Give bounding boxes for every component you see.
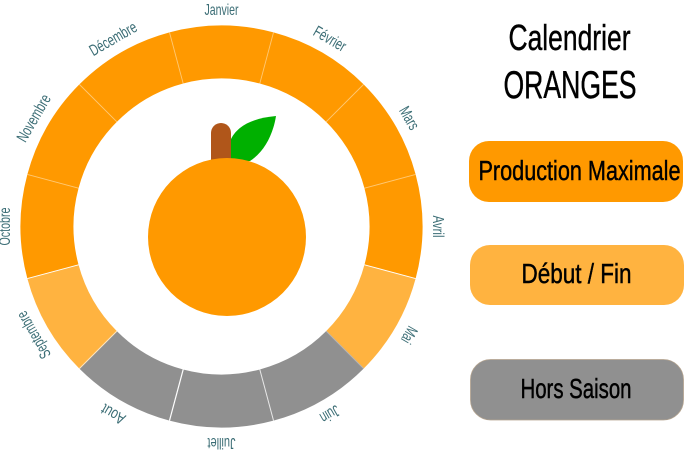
label: Novembre: Novembre [14, 92, 55, 145]
icon: leaf [231, 116, 276, 162]
icon: stem [211, 123, 231, 165]
label: Mai: Mai [397, 323, 420, 346]
legend item: Hors Saison: Hors Saison [520, 373, 632, 404]
segment: Novembre [21, 81, 124, 200]
segment: Octobre [21, 174, 79, 279]
icon: orange fruit [148, 116, 306, 316]
legend item: Début / Fin: Début / Fin [522, 258, 632, 289]
segment: Mai [319, 253, 422, 372]
label: Février: Février [310, 23, 349, 56]
calendar ring [21, 26, 422, 427]
segment: Mars [319, 81, 422, 200]
label: Juin: Juin [317, 401, 342, 426]
label: Mars: Mars [395, 104, 422, 133]
segment: Juin [248, 324, 367, 427]
label: Janvier: Janvier [204, 2, 239, 19]
label: Avril: Avril [429, 216, 446, 238]
legend [469, 141, 684, 420]
label: Décembre: Décembre [87, 19, 140, 60]
segment: Août [76, 324, 195, 427]
label: Juillet: Juillet [207, 434, 236, 451]
title line: Calendrier: Calendrier [508, 17, 631, 58]
segment: Février [248, 26, 367, 129]
legend item: Début / Fin [470, 245, 684, 305]
legend item: Hors Saison [470, 360, 684, 420]
legend item: Production Maximale [469, 141, 683, 202]
label: Aout: Aout [98, 400, 129, 427]
label: Septembre: Septembre [14, 308, 55, 361]
icon: orange body [148, 158, 306, 316]
title [504, 17, 636, 107]
segment: Septembre [21, 253, 124, 372]
segment: Juillet [169, 369, 274, 427]
segment: Décembre [76, 26, 195, 129]
month labels [0, 2, 446, 451]
segment: Janvier [169, 26, 274, 84]
segment: Avril [364, 174, 422, 279]
